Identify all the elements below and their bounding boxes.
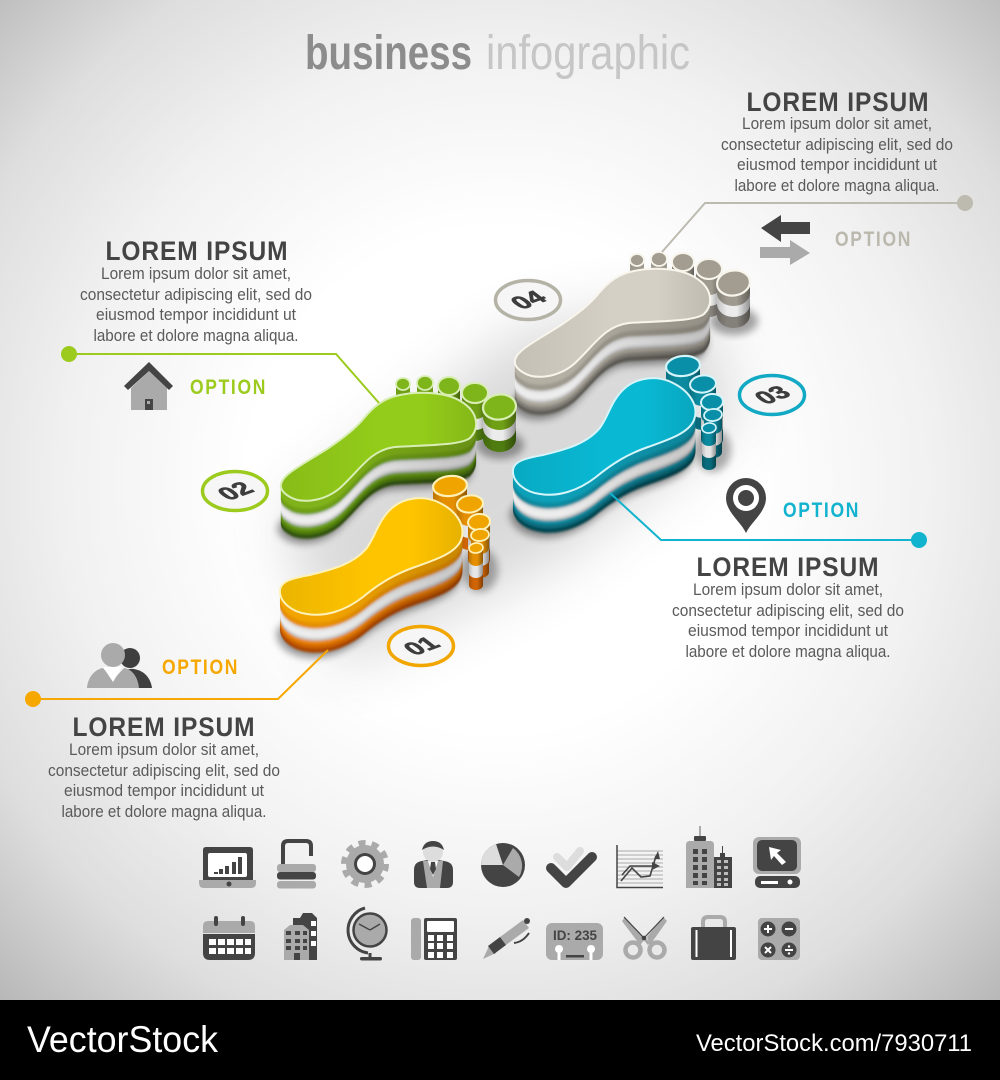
icon: pie chart: [481, 843, 525, 887]
title: infographic: [486, 27, 690, 80]
text block 04: labore et dolore magna aliqua.: [734, 176, 940, 195]
icon: id card: ID: 235: [553, 928, 597, 943]
icon: arrows: [760, 215, 810, 265]
icon: calendar: [203, 916, 255, 960]
connector: option 03: [610, 493, 927, 548]
text block 04: Lorem ipsum dolor sit amet,: [742, 114, 932, 133]
badge 04: [496, 280, 560, 320]
badge 02: 02: [212, 478, 260, 504]
icon: check mark: [551, 851, 592, 883]
text block 01: eiusmod tempor incididunt ut: [64, 781, 264, 800]
option label 04: OPTION: [835, 228, 912, 251]
text block 01: [48, 712, 280, 821]
footprint 01 orange: [277, 474, 498, 658]
badge 03: [740, 376, 804, 414]
text block 03: consectetur adipiscing elit, sed do: [672, 601, 904, 620]
icon: map pin: [726, 478, 766, 533]
text block 02: eiusmod tempor incididunt ut: [96, 305, 296, 324]
text block 04: [721, 87, 953, 195]
option label 03: OPTION: [783, 499, 860, 522]
badge 03: 03: [749, 382, 797, 408]
text block 02: consectetur adipiscing elit, sed do: [80, 285, 312, 304]
icon: math symbols: [758, 918, 800, 960]
option label 02: OPTION: [190, 376, 267, 399]
footprint 04 grey: [512, 252, 758, 420]
text block 02: LOREM IPSUM: [106, 236, 288, 266]
footer bar: VectorStock.com/7930711: [696, 1030, 972, 1057]
text block 01: labore et dolore magna aliqua.: [62, 802, 266, 821]
text block 04: eiusmod tempor incididunt ut: [737, 155, 937, 174]
icon: city buildings: [686, 826, 732, 888]
text block 03: LOREM IPSUM: [696, 552, 880, 582]
text block 04: consectetur adipiscing elit, sed do: [721, 135, 953, 154]
connector: option 02: [61, 346, 379, 403]
badge 04: 04: [505, 287, 553, 313]
text block 03: [672, 552, 904, 661]
icon: computer: [753, 837, 801, 888]
title: business: [305, 27, 472, 80]
icon: briefcase: [691, 917, 736, 960]
text block 02: [80, 236, 312, 345]
icon: gear: [344, 843, 386, 885]
badge 01: 01: [398, 633, 446, 659]
text block 04: LOREM IPSUM: [746, 87, 930, 117]
footprint 02 green: [278, 376, 524, 544]
footer bar: VectorStock: [27, 1019, 218, 1060]
icon: businessman: [414, 841, 453, 888]
text block 01: consectetur adipiscing elit, sed do: [48, 761, 280, 780]
text block 03: labore et dolore magna aliqua.: [686, 642, 890, 661]
icon: office building: [284, 913, 317, 960]
icon: id card: [546, 923, 603, 960]
soft shadow under footprints: [280, 300, 740, 670]
footer bar: [0, 1000, 1000, 1080]
text block 02: Lorem ipsum dolor sit amet,: [101, 264, 291, 283]
icon: pen: [483, 918, 530, 959]
option label 01: OPTION: [162, 656, 239, 679]
icon: globe clock: [348, 908, 386, 960]
text block 03: eiusmod tempor incididunt ut: [688, 621, 888, 640]
icon: house: [124, 362, 173, 410]
icon: laptop: [199, 847, 256, 888]
icon: calculator: [411, 918, 457, 960]
badge 01: [388, 626, 454, 666]
text block 01: LOREM IPSUM: [72, 712, 256, 742]
icon: line chart: [617, 845, 663, 888]
icon: scissors: [622, 917, 667, 958]
text block 01: Lorem ipsum dolor sit amet,: [69, 740, 259, 759]
connector: option 04: [662, 195, 973, 252]
badge 02: [202, 472, 268, 510]
title: [305, 27, 690, 80]
text block 03: Lorem ipsum dolor sit amet,: [693, 580, 883, 599]
footprint 03 teal: [510, 354, 731, 538]
text block 02: labore et dolore magna aliqua.: [94, 326, 298, 345]
connector: option 01: [25, 650, 328, 707]
icon: open lock: [277, 841, 316, 888]
icon: people: [87, 643, 152, 688]
